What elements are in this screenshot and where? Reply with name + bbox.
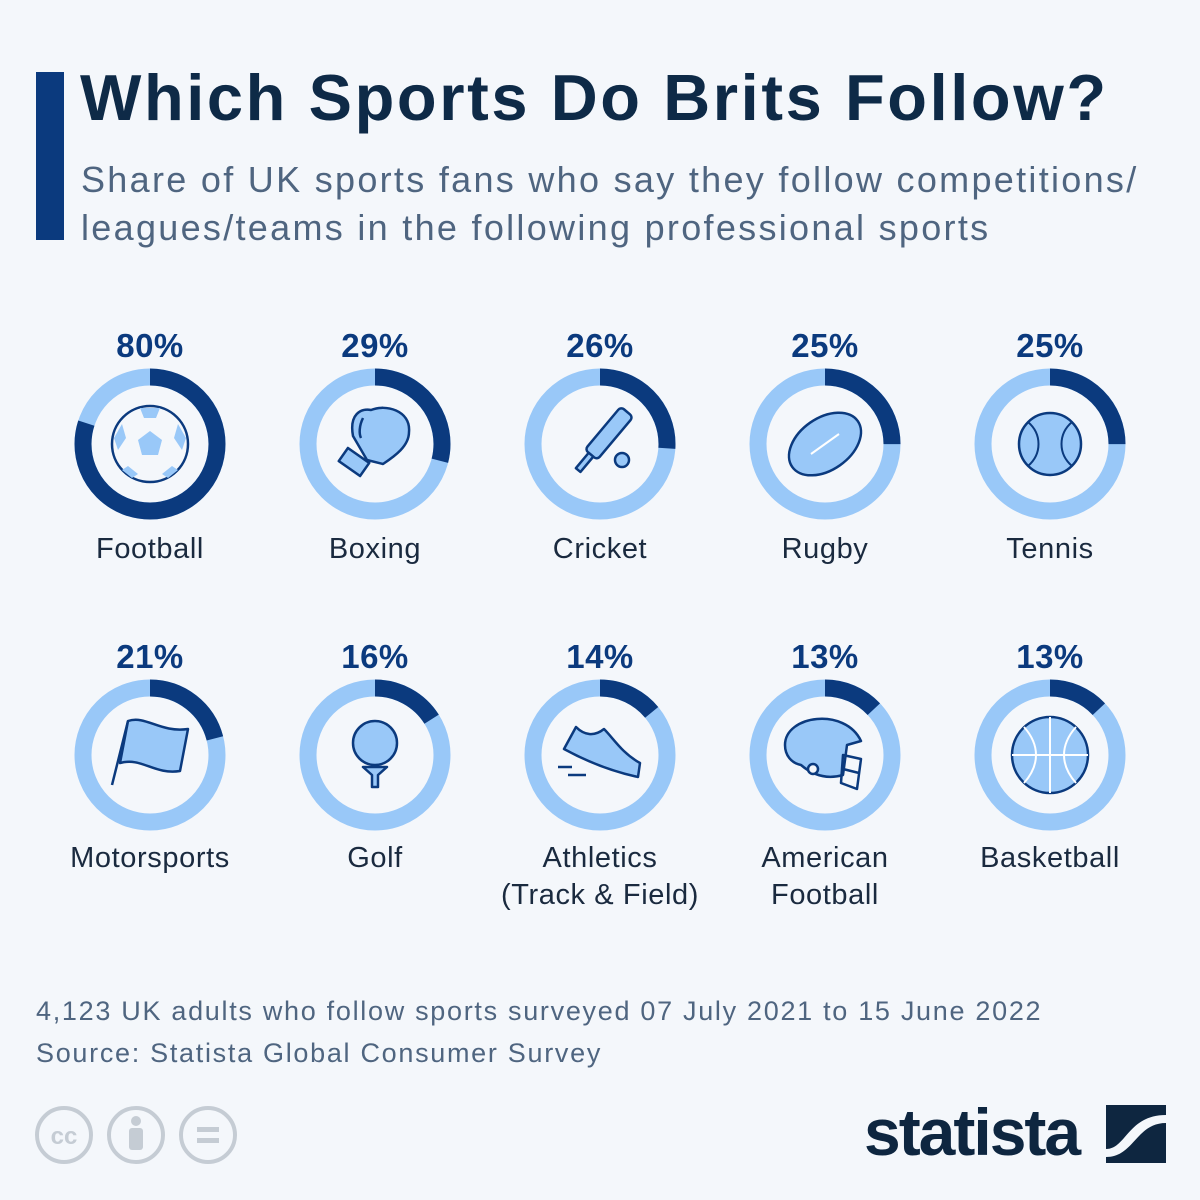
icons: license: cc — [51, 1123, 77, 1150]
percentages and labels row 2: Motorsports — [70, 842, 230, 874]
donut: Tennis 25% — [983, 377, 1117, 511]
icon: rugby ball — [777, 400, 873, 488]
icon: tennis ball — [1019, 413, 1081, 475]
subtitle — [81, 159, 1139, 248]
donut: Basketball 13% — [983, 688, 1117, 822]
percentages and labels row 1: Cricket — [553, 533, 647, 565]
source note: 4,123 UK adults who follow sports surveyed 07 July 2021 to 15 June 2022 — [36, 996, 1042, 1026]
donut: American Football 13% — [758, 688, 892, 822]
percentages and labels row 2: 13% — [791, 638, 859, 675]
donut: Golf 16% — [308, 688, 442, 822]
donut: Cricket 26% — [533, 377, 667, 511]
percentages and labels row 2: 21% — [116, 638, 184, 675]
donut: Boxing 29% — [308, 377, 442, 511]
percentages and labels row 2: Football — [771, 879, 879, 911]
percentages and labels row 1: 26% — [566, 327, 634, 364]
logo: statista: statista — [864, 1095, 1079, 1169]
icon: running shoe — [558, 727, 640, 777]
percentages and labels row 1: Tennis — [1006, 533, 1094, 565]
icon: golf ball on tee — [353, 721, 397, 787]
subtitle: Share of UK sports fans who say they follow competitions/ — [81, 159, 1139, 200]
icon: checkered flag — [112, 720, 188, 785]
donut: Rugby 25% — [758, 377, 892, 511]
percentages and labels row 2: Basketball — [980, 842, 1120, 874]
percentages and labels row 1: Boxing — [329, 533, 421, 565]
percentages and labels row 1: Rugby — [782, 533, 868, 565]
subtitle: leagues/teams in the following professional sports — [81, 207, 990, 248]
donut: Motorsports 21% — [83, 688, 217, 822]
icon: basketball — [1012, 717, 1088, 793]
percentages and labels row 2: (Track & Field) — [501, 879, 699, 911]
donut: Athletics 14% — [533, 688, 667, 822]
percentages and labels row 2: Athletics — [542, 842, 658, 874]
percentages and labels row 2: Golf — [347, 842, 403, 874]
source note — [36, 996, 1042, 1068]
percentages and labels row 1: 25% — [1016, 327, 1084, 364]
donut: Football 80% — [83, 377, 217, 511]
percentages and labels row 1 — [96, 327, 1094, 565]
percentages and labels row 1: 80% — [116, 327, 184, 364]
percentages and labels row 2: American — [761, 842, 889, 874]
percentages and labels row 2: 13% — [1016, 638, 1084, 675]
icon: football — [112, 406, 188, 482]
percentages and labels row 1: 25% — [791, 327, 859, 364]
title: Which Sports Do Brits Follow? — [80, 61, 1109, 134]
title accent bar — [36, 72, 64, 240]
icon: cricket bat — [576, 407, 633, 472]
icons: license — [35, 1106, 237, 1164]
icon: helmet — [785, 719, 861, 789]
percentages and labels row 1: Football — [96, 533, 204, 565]
source note: Source: Statista Global Consumer Survey — [36, 1038, 602, 1068]
percentages and labels row 2: 16% — [341, 638, 409, 675]
icon: boxing glove — [339, 408, 409, 476]
percentages and labels row 2: 14% — [566, 638, 634, 675]
percentages and labels row 2 — [70, 638, 1120, 911]
percentages and labels row 1: 29% — [341, 327, 409, 364]
